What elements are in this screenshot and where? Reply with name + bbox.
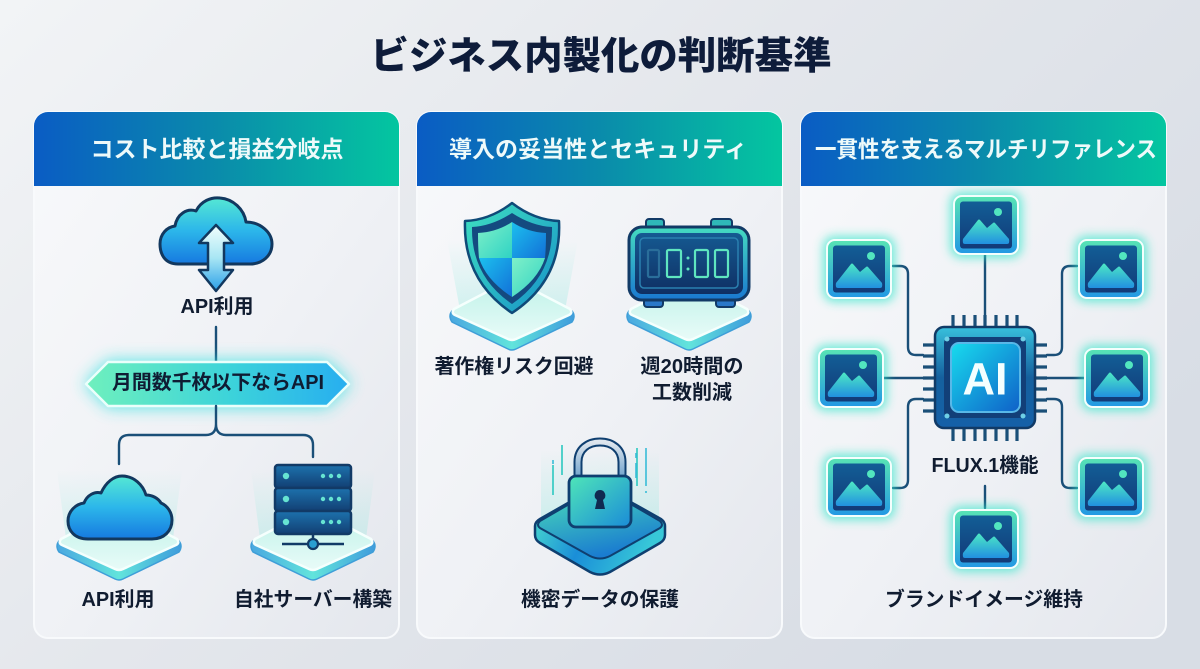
label: 週20時間の工数削減: 週20時間の bbox=[640, 355, 744, 378]
panel 3 card bbox=[801, 112, 1166, 638]
icon: image tile middle left bbox=[815, 345, 887, 411]
label: 週20時間の工数削減: 工数削減 bbox=[652, 380, 732, 404]
panel 2 header: 導入の妥当性とセキュリティ bbox=[449, 136, 747, 162]
label: ブランドイメージ維持: ブランドイメージ維持 bbox=[885, 587, 1083, 611]
label: 機密データの保護: 機密データの保護 bbox=[521, 587, 679, 611]
icon: image tile bottom bbox=[950, 506, 1022, 572]
label: 著作権リスク回避: 著作権リスク回避 bbox=[434, 355, 594, 378]
panel 3 header: 一貫性を支えるマルチリファレンス bbox=[815, 136, 1157, 162]
icon: AI chip: AI bbox=[962, 354, 1008, 404]
label: FLUX.1機能: FLUX.1機能 bbox=[932, 454, 1038, 477]
label: API利用 (bottom): API利用 bbox=[82, 588, 154, 611]
icon: server rack on platform bbox=[251, 465, 375, 580]
panel: multi-reference bbox=[801, 112, 1166, 638]
label: 週20時間の工数削減 bbox=[640, 355, 744, 404]
icon: shield on platform bbox=[447, 203, 578, 350]
icon: image tile lower left bbox=[823, 454, 895, 520]
clock digits bbox=[648, 250, 728, 277]
label: 自社サーバー構築: 自社サーバー構築 bbox=[234, 588, 392, 611]
icon: digital clock on platform bbox=[627, 219, 751, 350]
icon: image tile top bbox=[950, 192, 1022, 258]
banner: threshold bbox=[84, 360, 351, 408]
icon: image tile lower right bbox=[1075, 454, 1147, 520]
connector: branch bbox=[119, 406, 313, 464]
panel 2 card bbox=[417, 112, 782, 638]
icon: image tile middle right bbox=[1081, 345, 1153, 411]
label: API利用 (top): API利用 bbox=[180, 295, 254, 318]
icon: image tile upper right bbox=[1075, 236, 1147, 302]
panel 1 card bbox=[34, 112, 399, 638]
title: ビジネス内製化の判断基準 bbox=[370, 35, 832, 78]
connector: top to banner bbox=[215, 327, 217, 362]
panel 3 header bbox=[801, 112, 1166, 186]
icon: cloud on platform bbox=[57, 470, 182, 580]
panel 2 header bbox=[417, 112, 782, 186]
banner: threshold: 月間数千枚以下ならAPI bbox=[112, 371, 324, 394]
panel: validity and security bbox=[417, 112, 782, 638]
icon: AI chip bbox=[923, 315, 1047, 441]
icon: padlock on base bbox=[535, 442, 665, 574]
panel: cost comparison bbox=[34, 112, 399, 638]
panel 1 header: コスト比較と損益分岐点 bbox=[90, 136, 344, 162]
icon: image tile upper left bbox=[823, 236, 895, 302]
panel 1 header bbox=[34, 112, 399, 186]
icon: cloud with up-down arrow bbox=[160, 198, 272, 291]
connectors to chip bbox=[884, 255, 1084, 508]
